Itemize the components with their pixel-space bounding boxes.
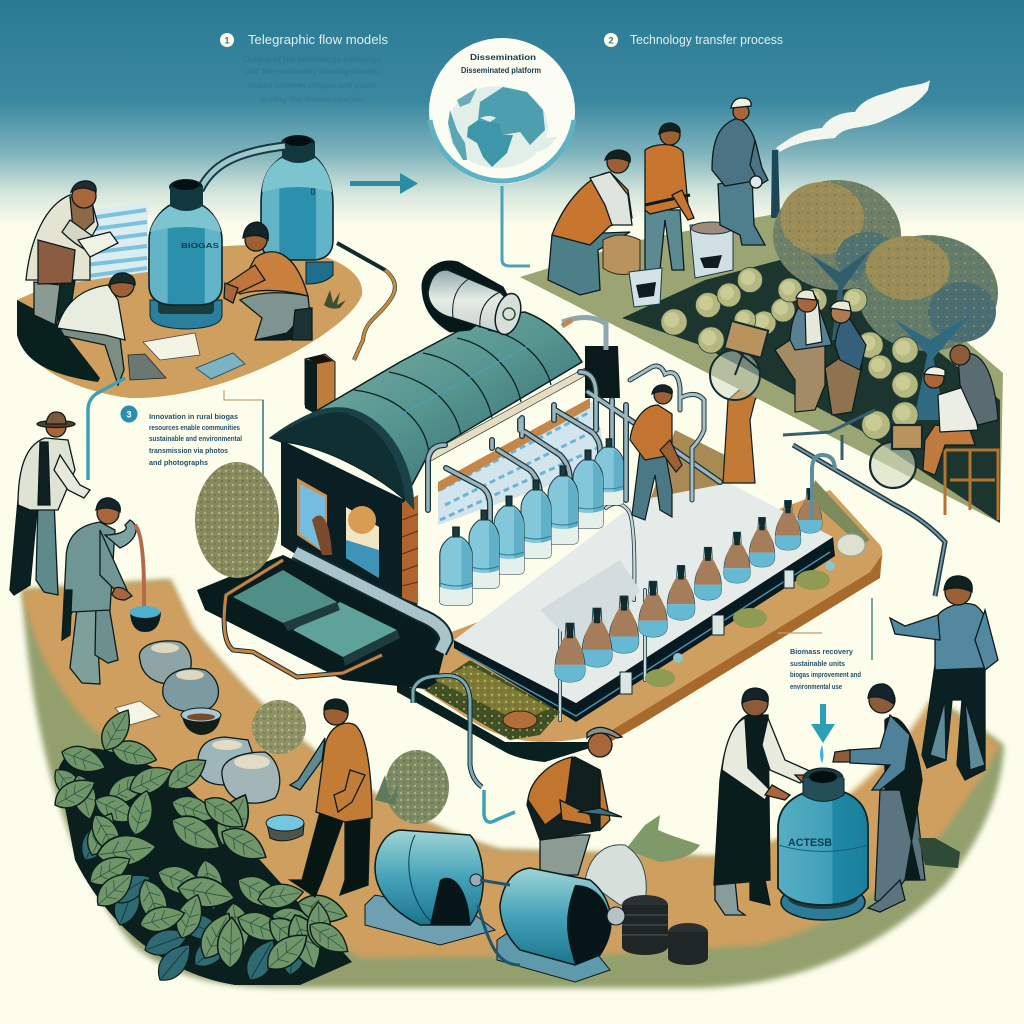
icon: bicycle right [870,425,922,488]
icon: machine right [478,868,625,982]
text block: lower-right note: sustainable units [790,661,845,668]
icon: rear tank [261,135,333,284]
black wall [281,440,418,610]
icon: grass tuft [324,290,346,309]
text: globe caption: Disseminated platform [461,65,541,75]
person: middle worker [630,385,682,520]
panel: leaf cluster [48,704,355,987]
icon: rear tank: [] [311,189,315,195]
text: description: resources enable communities [149,423,240,432]
panel: globe callout [429,38,575,266]
text block: lower-right note: Biomass recovery [790,649,853,656]
field behind [650,430,725,525]
icon: blue plans [74,202,148,282]
icon: pamphlet [196,353,245,379]
timber edge [590,555,882,748]
pipe: teal feed [88,378,125,480]
icon: black hose stacks [622,895,708,965]
icon: bowl [130,606,161,632]
black underside [397,680,590,762]
trees [773,180,998,420]
text block: faint description: during the demonstration [260,95,364,104]
side shrub [195,462,279,578]
icon: hose between tanks [200,146,285,190]
icon: white buckets [629,222,733,307]
panel: top-right terrace [520,80,1003,523]
icon: bicycle left [710,321,768,400]
person: crouching orange [224,222,312,340]
person: vest worker right [833,684,925,912]
text block: faint description: Outline of the technology exchange [243,55,382,64]
panel: top-left workshop [17,135,395,398]
text block: faint description: and the community learning models [246,67,379,76]
person: kneeling worker [548,150,632,295]
hose right [337,243,395,360]
text block: lower-right note: environmental use [790,684,842,691]
panel: central plant [195,261,882,762]
icon: woven basket [603,235,640,275]
icon: big tank [778,768,868,920]
tray floor [454,483,833,703]
chimney [305,354,335,418]
panel: left text callout [120,390,263,510]
person: seated elders [775,290,866,415]
icon: water bowl [266,815,304,841]
brackets [620,570,794,694]
black box tank [585,346,620,398]
roof [270,312,582,500]
icon: front tank [149,179,222,329]
icon: sacks lower [198,737,280,803]
text: description: sustainable and environmental [149,434,242,443]
person: cap man [527,727,622,875]
icon: number badge: 3 [126,410,132,420]
pipe: lower hanging [413,676,515,822]
person: orange standing [645,123,694,270]
person: apron worker left [714,688,815,915]
icon: front tank: BIOGAS [181,243,219,250]
shrub strip [810,480,870,545]
back roll tank [422,261,525,337]
icon: paper [143,333,200,360]
brick [402,495,418,604]
copper pipe [224,560,382,677]
heading: section 2: 2 [608,36,614,46]
icon: machine left [365,830,495,945]
pipe: right outlet [793,445,945,596]
icon: number badge [120,406,138,422]
floor mottling [540,560,640,660]
icon: feed sack [585,845,646,905]
tray frame [454,537,835,722]
pipe: drain [783,410,875,460]
person: blue man standing [890,576,998,780]
text: description [149,412,242,467]
text block: faint description: shared between villages and plants [247,81,378,90]
person: man pouring [62,498,144,684]
text: description: Innovation in rural biogas [149,412,238,421]
flask row [555,488,822,682]
icon: chimney with smoke [771,80,930,218]
bushes [661,267,918,439]
text block: faint description [243,55,382,104]
water strip [438,400,607,525]
text: description: and photographs [149,458,208,467]
arrow: down to tank [811,704,835,763]
dark hedges [622,260,1000,523]
windows [297,478,379,578]
icon: small shrub right [918,838,960,868]
heading: section 1: Telegraphic flow models [248,32,389,47]
panel: ground path [22,580,1004,988]
tiny lawn discs [645,534,865,687]
dark slab base [197,555,450,690]
icon: seedling grass [625,815,700,862]
text block: lower-right note: biogas improvement and [790,672,861,679]
heading: section 2: Technology transfer process [630,32,783,47]
icon: wooden bench [945,450,998,520]
text: globe caption [461,52,541,75]
icon: dark bowl [181,708,221,735]
big pipe [295,552,446,652]
text: description: transmission via photos [149,446,228,455]
person: standing with paper [26,181,118,325]
icon: globe [448,86,558,168]
platform [17,245,362,398]
person: rider lower right [923,345,998,475]
bottle row [440,439,623,605]
green ground [520,213,1003,523]
icon: shrubs [252,700,449,824]
arrow: to globe [350,173,418,194]
tan platform [385,490,882,742]
heading: section 1: 1 [224,36,230,46]
pipes [428,366,720,720]
solar panels [233,570,400,666]
icon: sacks upper [139,641,218,712]
text: tank label: ACTESB [788,837,832,849]
person: seated reading [57,273,135,385]
person: blue elder [712,98,768,245]
text: globe caption: Dissemination [470,52,536,62]
person: orange man with bowl [290,699,372,897]
person: man in hat [10,412,90,595]
text block: lower-right note [778,598,872,691]
planter [425,660,560,740]
person: orange robe [723,356,778,483]
icon: notebook [115,701,160,725]
